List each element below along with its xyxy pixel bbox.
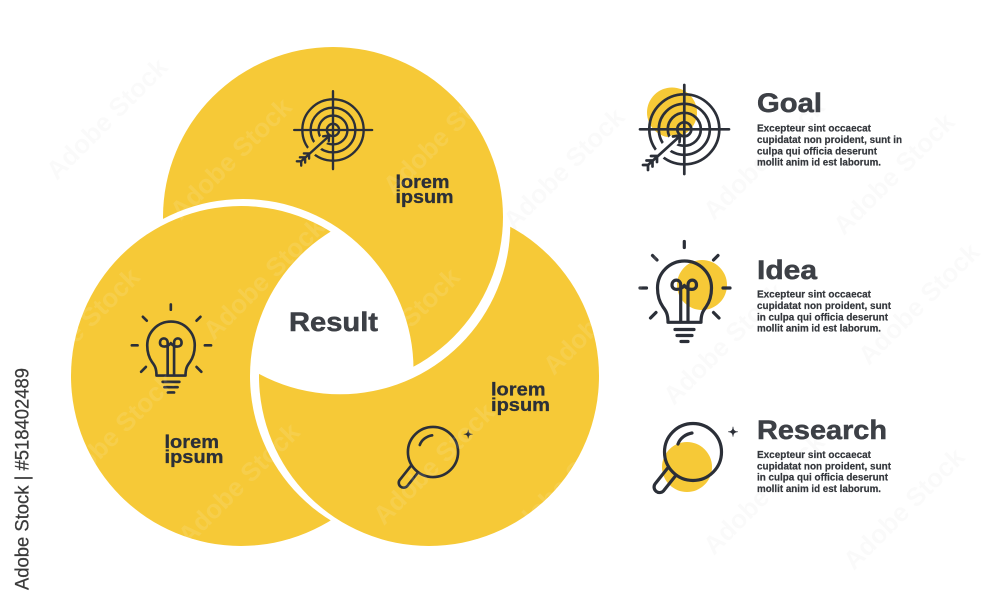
watermark pattern: Adobe Stock <box>172 416 306 550</box>
body text: Research: in culpa qui officia deserunt <box>757 473 889 484</box>
circle segment: research <box>259 206 599 546</box>
body text: Idea: mollit anim id est laborum. <box>757 324 881 335</box>
watermark pattern: Adobe Stock <box>537 246 671 380</box>
watermark pattern: Adobe Stock <box>497 416 631 550</box>
body text: Research: mollit anim id est laborum. <box>757 484 881 495</box>
legend item: Research <box>654 415 892 495</box>
label: lorem ipsum (idea): ipsum <box>164 446 224 467</box>
label: lorem ipsum (idea): lorem <box>164 431 219 452</box>
body text: Idea <box>757 290 892 335</box>
watermark pattern: Adobe Stock <box>367 396 501 530</box>
circle segment: goal <box>163 47 503 387</box>
heading: Idea: Idea <box>757 255 818 285</box>
body text: Goal <box>757 124 902 169</box>
icon: target with yellow spot <box>640 85 729 174</box>
icon: target on goal segment <box>294 91 372 169</box>
heading: Goal: Goal <box>757 88 822 118</box>
label: lorem ipsum (goal): lorem <box>396 171 450 192</box>
label: lorem ipsum (goal): ipsum <box>396 186 454 207</box>
label: lorem ipsum (idea) <box>164 431 224 467</box>
watermark pattern: Adobe Stock <box>164 91 298 225</box>
icon: magnifier with yellow spot <box>654 424 738 493</box>
body text: Idea: Excepteur sint occaecat <box>757 290 872 301</box>
body text: Goal: mollit anim id est laborum. <box>757 158 881 169</box>
watermark pattern: Adobe Stock <box>197 211 331 345</box>
stock credit: Adobe Stock | #518402489 <box>12 368 34 590</box>
body text: Research: Excepteur sint occaecat <box>757 450 872 461</box>
center label: Result: Result <box>289 307 378 337</box>
watermark pattern: Adobe Stock <box>377 66 511 200</box>
label: lorem ipsum (research) <box>491 378 550 415</box>
watermark pattern: Adobe Stock <box>332 261 466 395</box>
circle segment: idea <box>71 206 331 546</box>
icon: light bulb with yellow spot <box>640 242 730 342</box>
body text: Idea: cupidatat non proident, sunt <box>757 301 892 312</box>
body text: Goal: cupidatat non proident, sunt in <box>757 135 902 146</box>
label: lorem ipsum (research): lorem <box>491 378 546 400</box>
label: lorem ipsum (research): ipsum <box>491 394 550 415</box>
body text: Research <box>757 450 892 495</box>
legend item: Idea <box>640 242 892 342</box>
icon: magnifier on research segment <box>399 427 473 488</box>
legend item: Goal <box>640 85 902 174</box>
heading: Research: Research <box>757 415 887 445</box>
body text: Goal: Excepteur sint occaecat <box>757 124 872 135</box>
watermark pattern: Adobe Stock <box>47 366 181 500</box>
label: lorem ipsum (goal) <box>396 171 454 207</box>
body text: Idea: in culpa qui officia deserunt <box>757 312 889 323</box>
watermark pattern: Adobe Stock <box>12 261 146 395</box>
body text: Goal: culpa qui officia deserunt <box>757 146 878 157</box>
body text: Research: cupidatat non proident, sunt <box>757 461 892 472</box>
venn diagram <box>71 47 599 546</box>
icon: light bulb on idea segment <box>132 304 211 392</box>
